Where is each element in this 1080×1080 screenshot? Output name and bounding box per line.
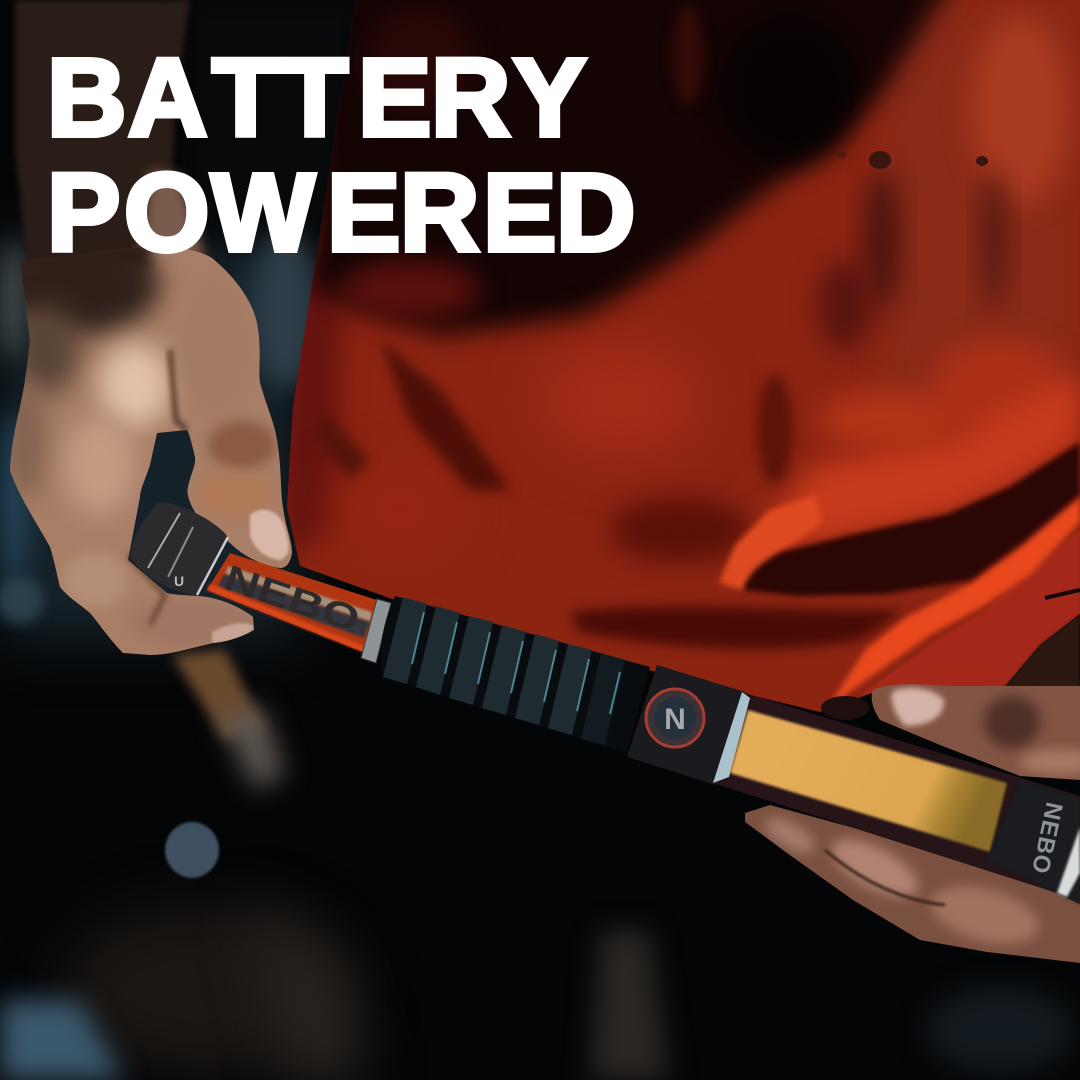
- small dark mark: [1045, 590, 1080, 598]
- left forearm in shadow: [15, 0, 205, 295]
- shaded back of hand: [20, 247, 158, 273]
- flashlight: [130, 502, 1080, 904]
- head collar: [627, 665, 745, 785]
- logo badge: [646, 689, 704, 747]
- upper finger: [860, 680, 1080, 780]
- silver bezel: [713, 692, 750, 783]
- battery end cap: U: [174, 573, 184, 589]
- lower fingers: [740, 800, 1080, 970]
- red shirt: [287, 0, 1080, 712]
- thumb: [128, 598, 252, 646]
- light body frame: [713, 692, 1080, 904]
- middle lit areas: [540, 345, 700, 455]
- yellow COB panel: [730, 710, 1007, 852]
- blurred stick behind hand: [172, 650, 265, 740]
- dark finger behind: [821, 696, 869, 720]
- lit zone above shadow band: [760, 375, 1080, 552]
- stain marks on shirt: [838, 151, 988, 169]
- forearm shadow behind: [1002, 614, 1080, 690]
- upper shirt shadow: [310, 0, 965, 335]
- knuckle glow: [99, 343, 171, 427]
- silver ring: [361, 599, 391, 663]
- bokeh light spots: [0, 576, 219, 878]
- large shadow band: [743, 442, 1080, 596]
- lower dark fold: [570, 607, 905, 649]
- logo badge: N: [664, 703, 686, 736]
- bright orange streak: [825, 497, 1080, 712]
- fold shadows: [380, 340, 510, 490]
- lower right cloth: [860, 530, 1080, 695]
- index finger: [235, 281, 246, 297]
- red battery tube with NEBO branding: [207, 553, 377, 652]
- title line 2: POWERED: [47, 152, 635, 274]
- battery end cap: [130, 502, 228, 595]
- title: [47, 36, 635, 274]
- right side cloth: [880, 0, 1080, 400]
- title line 1: BATTERY: [47, 36, 586, 160]
- flashlight end cap with brand: [987, 780, 1080, 904]
- right hand: [740, 614, 1080, 970]
- orange swoosh: [719, 495, 822, 590]
- fingernail: [250, 510, 289, 560]
- rubber grip: [381, 596, 650, 753]
- left hand: [0, 235, 300, 660]
- flashlight end cap with brand: NEBO: [1026, 800, 1068, 876]
- left shirt shade: [280, 260, 345, 560]
- red battery tube with NEBO branding: NEBO: [219, 557, 365, 640]
- brown blurred foreground shapes: [60, 905, 360, 1075]
